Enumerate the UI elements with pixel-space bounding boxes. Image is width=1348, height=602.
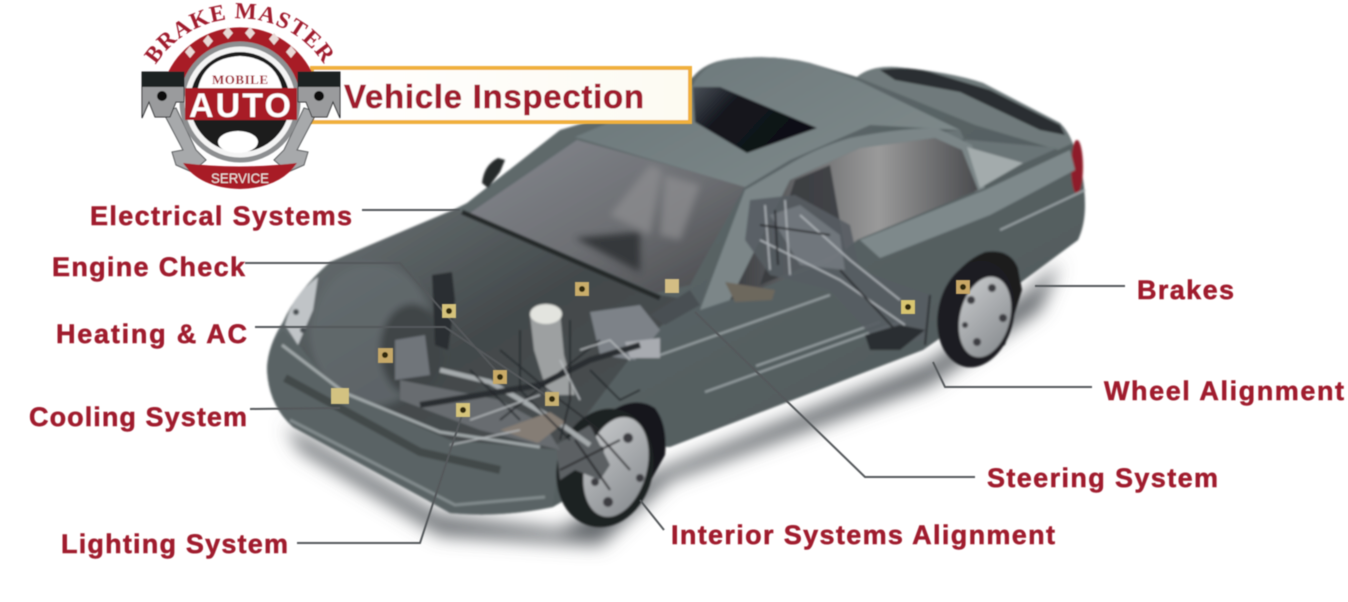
label: cooling system: Cooling System xyxy=(29,402,247,432)
line: heating and ac xyxy=(255,327,550,398)
logo arc text: BRAKE MASTER xyxy=(143,2,334,65)
mirror xyxy=(482,158,505,188)
logo xyxy=(140,2,342,190)
line: engine check xyxy=(245,263,500,375)
marker: strut xyxy=(442,304,456,318)
front wheel xyxy=(544,398,666,538)
headlight xyxy=(285,277,318,345)
label: interior systems alignment: Interior Systems Alignment xyxy=(671,520,1055,550)
line: interior systems alignment xyxy=(640,500,664,530)
marker: engine xyxy=(493,370,507,384)
logo auto band xyxy=(185,88,297,120)
label: engine check: Engine Check xyxy=(52,252,246,282)
logo connecting rods xyxy=(163,108,317,172)
line: electrical systems xyxy=(362,209,460,211)
marker: column xyxy=(665,279,679,293)
marker: radiator xyxy=(331,388,349,404)
trunk and spoiler xyxy=(857,67,1073,150)
car illustration xyxy=(267,57,1085,545)
ghost front wheel under hood xyxy=(310,263,444,407)
rear wheel arch xyxy=(945,251,1022,365)
line: lighting system xyxy=(297,412,463,543)
engine and suspension parts xyxy=(395,195,930,450)
label: wheel alignment: Wheel Alignment xyxy=(1104,376,1344,406)
logo mobile text: MOBILE xyxy=(212,72,268,87)
title text: Vehicle Inspection xyxy=(344,78,644,115)
ground shadow xyxy=(285,262,1060,545)
front door window interior xyxy=(730,138,978,300)
logo left piston xyxy=(142,72,184,118)
logo dome icons xyxy=(185,27,296,58)
roof xyxy=(575,57,960,187)
rear quarter highlight xyxy=(860,150,1075,258)
leader lines xyxy=(245,210,1125,543)
labels xyxy=(29,201,1344,559)
A pillar and door frame xyxy=(700,128,985,310)
marker: rear axle xyxy=(901,300,915,314)
marker: lighting xyxy=(456,403,470,417)
marker: steering rack xyxy=(545,392,559,406)
logo red dome xyxy=(166,27,314,100)
label: steering system: Steering System xyxy=(987,463,1218,493)
wipers and cowl xyxy=(462,212,660,298)
engine wiring xyxy=(470,320,640,440)
door lines xyxy=(660,190,1085,392)
marker: rear brake xyxy=(956,280,970,294)
logo right piston xyxy=(298,72,340,118)
windshield xyxy=(470,140,745,293)
rear deck xyxy=(915,130,1058,185)
line: cooling system xyxy=(250,408,340,409)
logo bottom red band xyxy=(183,163,297,189)
label: lighting system: Lighting System xyxy=(61,529,288,559)
label: brakes: Brakes xyxy=(1137,275,1234,305)
logo steering wheel xyxy=(182,44,298,160)
front wheel arch xyxy=(600,402,666,500)
inspection point markers xyxy=(331,279,970,417)
rear suspension xyxy=(745,195,930,345)
taillight xyxy=(1071,140,1083,194)
rear wheel xyxy=(928,253,1024,375)
label: electrical systems: Electrical Systems xyxy=(90,201,352,231)
car body xyxy=(267,57,1085,515)
rear quarter window xyxy=(967,147,1023,188)
marker: front brake xyxy=(378,348,393,363)
logo service text: SERVICE xyxy=(211,170,269,186)
title box xyxy=(312,68,690,122)
front bumper xyxy=(267,330,560,515)
line: steering system xyxy=(695,312,975,477)
marker: cowl xyxy=(575,282,589,296)
logo auto text: AUTO xyxy=(189,87,291,125)
label: heating and ac: Heating & AC xyxy=(56,319,247,349)
sunroof xyxy=(693,87,817,153)
line: wheel alignment xyxy=(933,362,1092,387)
hood xyxy=(290,210,690,450)
seats seen through windshield xyxy=(575,165,700,272)
line: brakes xyxy=(1035,285,1125,287)
